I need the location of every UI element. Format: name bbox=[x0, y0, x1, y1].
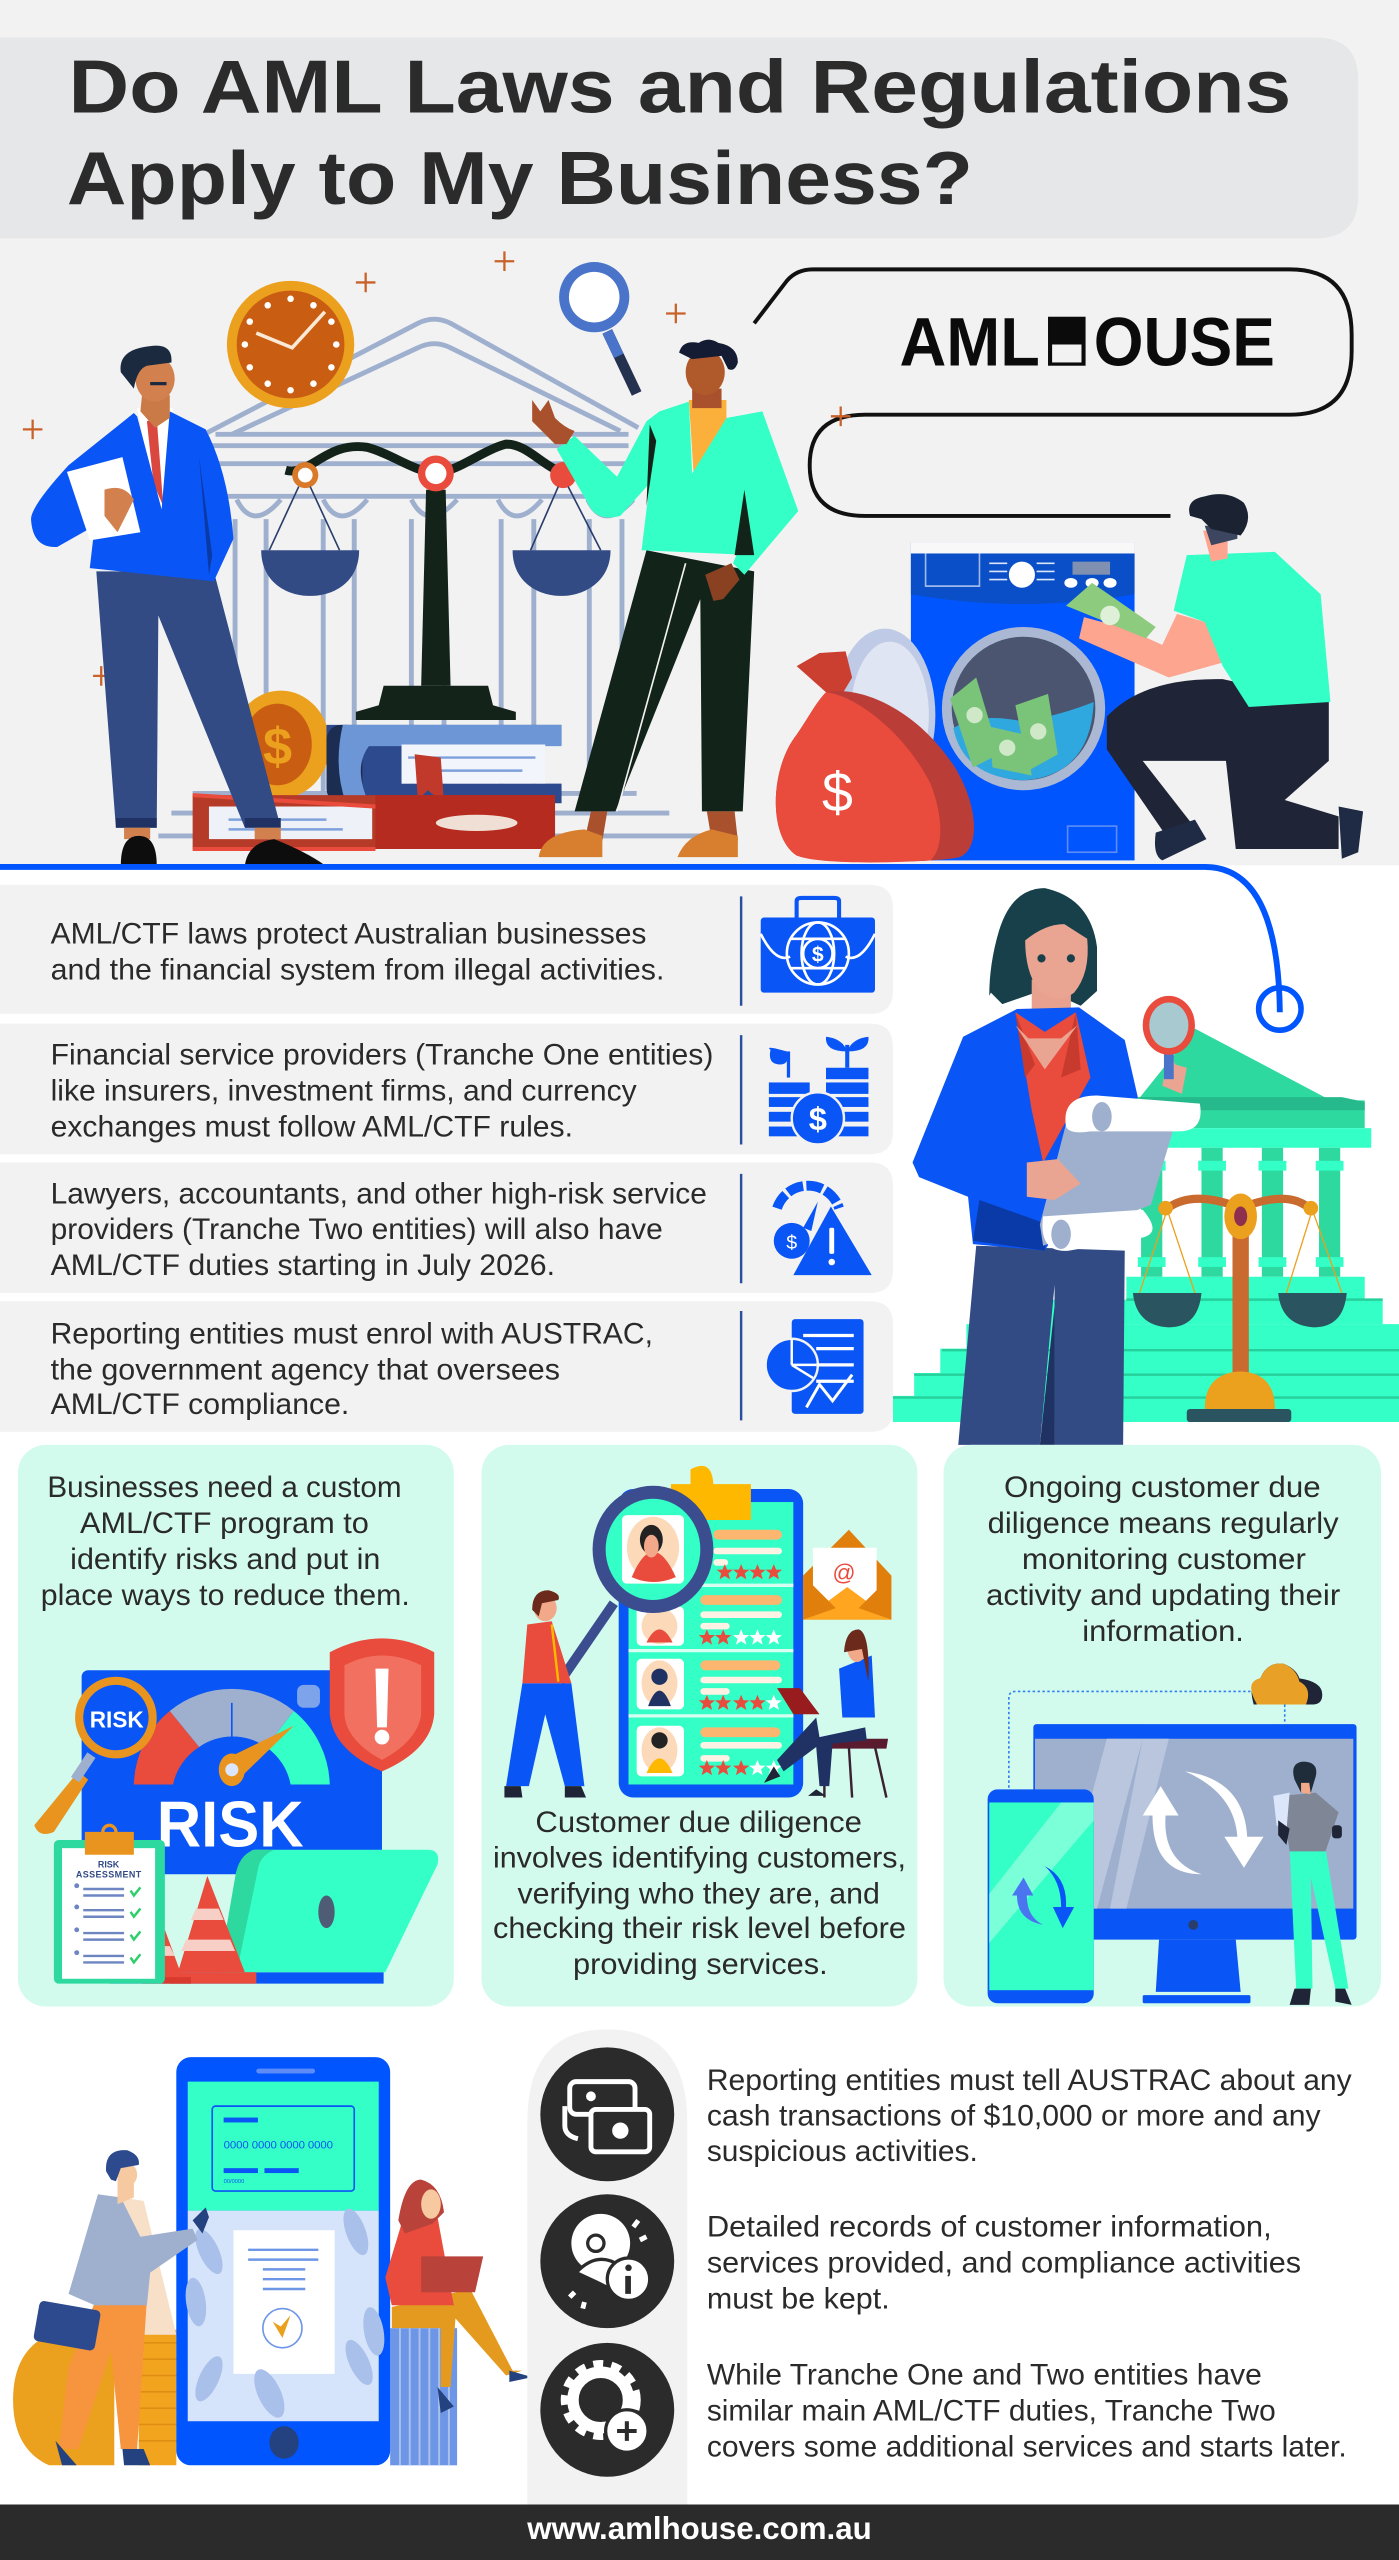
icon: wall clock bbox=[227, 281, 354, 408]
panel: info rows bbox=[0, 885, 893, 1432]
washer door bbox=[834, 629, 935, 802]
icon: risk magnifier: RISK bbox=[90, 1706, 144, 1732]
panel: custom program card: place ways to reduce them. bbox=[41, 1579, 410, 1612]
text block: tranche differences: While Tranche One and Two entities have bbox=[707, 2358, 1262, 2391]
text block: tranche differences: covers some additional services and starts later. bbox=[707, 2430, 1347, 2463]
text block: records: must be kept. bbox=[707, 2283, 890, 2316]
icon: warning shield bbox=[330, 1638, 434, 1771]
illustration: person at monitor bbox=[1273, 1762, 1352, 2005]
illustration: risk assessment clipboard: RISK bbox=[98, 1860, 120, 1870]
panel: customer due diligence card bbox=[482, 1445, 917, 2007]
row: Tranche Two: providers (Tranche Two entities) will also have bbox=[51, 1213, 663, 1246]
illustration: green bank building behind woman bbox=[893, 1029, 1399, 1422]
icon: red money bag bbox=[776, 651, 974, 862]
text block: records: Detailed records of customer information, bbox=[707, 2211, 1272, 2244]
panel: ongoing due diligence card: activity and updating their bbox=[986, 1579, 1340, 1612]
text block: reporting: suspicious activities. bbox=[707, 2135, 978, 2168]
receipt bbox=[233, 2230, 335, 2374]
sparkle plus marks bbox=[23, 251, 851, 686]
payment card on screen: 00/0000 bbox=[224, 2179, 244, 2185]
panel: custom program card: AML/CTF program to bbox=[80, 1507, 369, 1540]
illustration: smartphone with sync arrows bbox=[988, 1789, 1094, 2003]
panel: custom program card bbox=[18, 1445, 454, 2007]
panel: custom program card: identify risks and put in bbox=[70, 1543, 380, 1576]
panel: customer due diligence card: checking their risk level before bbox=[493, 1912, 906, 1945]
icon: magnifying glass bbox=[559, 262, 637, 393]
illustration: seated woman with laptop bbox=[764, 1629, 888, 1798]
panel: ongoing due diligence card bbox=[944, 1445, 1381, 2007]
illustration: mint laptop bbox=[109, 1850, 438, 1984]
row: AUSTRAC enrolment: Reporting entities must enrol with AUSTRAC, bbox=[51, 1318, 653, 1351]
title banner bbox=[0, 38, 1358, 238]
blue connector line with ring bbox=[0, 867, 1301, 1030]
text block: reporting: Reporting entities must tell AUSTRAC about any bbox=[707, 2064, 1352, 2097]
icon: gold dollar coin bbox=[232, 691, 330, 798]
panel: ongoing due diligence card: Ongoing customer due bbox=[1004, 1471, 1321, 1504]
panel: custom program card: Businesses need a custom bbox=[47, 1471, 402, 1504]
row: Tranche Two: AML/CTF duties starting in July 2026. bbox=[51, 1249, 555, 1282]
illustration: justice scale bbox=[261, 444, 611, 720]
icon: email envelope: @ bbox=[832, 1559, 856, 1585]
illustration: risk assessment clipboard: ASSESSMENT bbox=[76, 1870, 142, 1880]
logo: AML House: AML bbox=[899, 304, 1040, 381]
icon: cloud with dotted link bbox=[1009, 1664, 1322, 1788]
panel: customer due diligence card: involves identifying customers, bbox=[493, 1842, 906, 1875]
illustration: risk board bbox=[82, 1670, 382, 1874]
illustration: man in blue suit with paper bbox=[31, 346, 325, 865]
logo: AML House: OUSE bbox=[1094, 304, 1275, 381]
big gold coin and stack bbox=[13, 2196, 176, 2465]
panel: customer due diligence card: verifying who they are, and bbox=[517, 1878, 880, 1911]
panel: ongoing due diligence card: monitoring customer bbox=[1022, 1543, 1306, 1576]
row: AML/CTF laws: and the financial system from illegal activities. bbox=[51, 954, 664, 987]
column: dark icon pill bbox=[527, 2029, 687, 2504]
panel: ongoing due diligence card: diligence means regularly bbox=[988, 1507, 1339, 1540]
icon: customer information bbox=[540, 2194, 674, 2328]
icon: risk magnifier bbox=[34, 1677, 157, 1834]
illustration: woman with scroll bbox=[913, 888, 1201, 1445]
illustration: orange scale on green steps bbox=[1133, 1193, 1347, 1422]
illustration: traffic cones bbox=[142, 1876, 256, 1984]
text block: tranche differences bbox=[707, 2358, 1347, 2463]
row: Tranche Two bbox=[0, 1162, 893, 1293]
text block: records: services provided, and compliance activities bbox=[707, 2247, 1301, 2280]
icon: coin stacks with plants bbox=[769, 1037, 869, 1144]
text block: reporting bbox=[707, 2064, 1352, 2168]
row: Tranche One bbox=[0, 1024, 893, 1154]
illustration: classical bank building bbox=[158, 319, 702, 836]
illustration: phone with customer profiles bbox=[619, 1466, 803, 1798]
icon: coin stacks with plants: $ bbox=[809, 1100, 827, 1137]
icon: globe briefcase: $ bbox=[812, 944, 824, 967]
illustration: risk board: RISK bbox=[157, 1788, 304, 1861]
icon: red money bag: $ bbox=[822, 761, 853, 823]
blue coin stack bbox=[390, 2328, 457, 2465]
hero background bbox=[0, 0, 1399, 865]
icon: risk gauge and warning triangle bbox=[774, 1186, 872, 1275]
icon: banknotes bbox=[540, 2047, 674, 2181]
row: AUSTRAC enrolment bbox=[0, 1301, 893, 1432]
text block: tranche differences: similar main AML/CTF duties, Tranche Two bbox=[707, 2394, 1276, 2427]
illustration: man with magnifier bbox=[504, 1590, 586, 1798]
row: AUSTRAC enrolment: the government agency that oversees bbox=[51, 1354, 560, 1387]
speech bubble with logo bbox=[754, 269, 1352, 516]
row: Tranche One: exchanges must follow AML/CTF rules. bbox=[51, 1110, 573, 1143]
icon: email envelope bbox=[803, 1530, 891, 1620]
icon: report document with chart bbox=[766, 1319, 864, 1414]
payment card on screen: 0000 0000 0000 0000 bbox=[224, 2140, 333, 2152]
footer bbox=[0, 2504, 1399, 2560]
illustration: magnifier over profile bbox=[560, 1486, 713, 1682]
icon: gear with plus bbox=[540, 2343, 674, 2477]
illustration: kneeling man with money bbox=[1066, 494, 1363, 860]
illustration: monitor with refresh arrows bbox=[1033, 1724, 1357, 2003]
row: Tranche Two: Lawyers, accountants, and other high-risk service bbox=[51, 1177, 707, 1210]
phone body bbox=[176, 2057, 390, 2465]
logo: AML House bbox=[899, 304, 1275, 381]
woman with laptop bbox=[385, 2180, 532, 2413]
row: AML/CTF laws bbox=[0, 885, 893, 1014]
row: Tranche One: Financial service providers (Tranche One entities) bbox=[51, 1038, 713, 1071]
panel: customer due diligence card: Customer due diligence bbox=[535, 1806, 862, 1839]
title banner: Apply to My Business? bbox=[67, 136, 973, 220]
row: AUSTRAC enrolment: AML/CTF compliance. bbox=[51, 1388, 349, 1421]
illustration: man in mint jacket bbox=[532, 340, 798, 857]
icon: risk gauge and warning triangle: $ bbox=[786, 1232, 797, 1254]
man with briefcase bbox=[33, 2150, 209, 2465]
icon: globe briefcase bbox=[761, 898, 875, 993]
icon: gold dollar coin: $ bbox=[263, 718, 292, 776]
panel: customer due diligence card: providing services. bbox=[573, 1948, 828, 1981]
illustration: blue washing machine bbox=[834, 542, 1135, 860]
text block: records bbox=[707, 2211, 1301, 2316]
panel: ongoing due diligence card: information. bbox=[1082, 1615, 1244, 1648]
row: AML/CTF laws: AML/CTF laws protect Australian businesses bbox=[51, 918, 646, 951]
footer: www.amlhouse.com.au bbox=[526, 2511, 872, 2546]
text block: reporting: cash transactions of $10,000 or more and any bbox=[707, 2100, 1321, 2133]
title banner: Do AML Laws and Regulations bbox=[69, 45, 1291, 129]
illustration: risk assessment clipboard bbox=[54, 1825, 165, 1984]
illustration: mobile payment scene bbox=[13, 2057, 532, 2465]
illustration: stack of books bbox=[193, 725, 562, 849]
payment card on screen bbox=[212, 2106, 354, 2191]
row: Tranche One: like insurers, investment firms, and currency bbox=[51, 1074, 637, 1107]
